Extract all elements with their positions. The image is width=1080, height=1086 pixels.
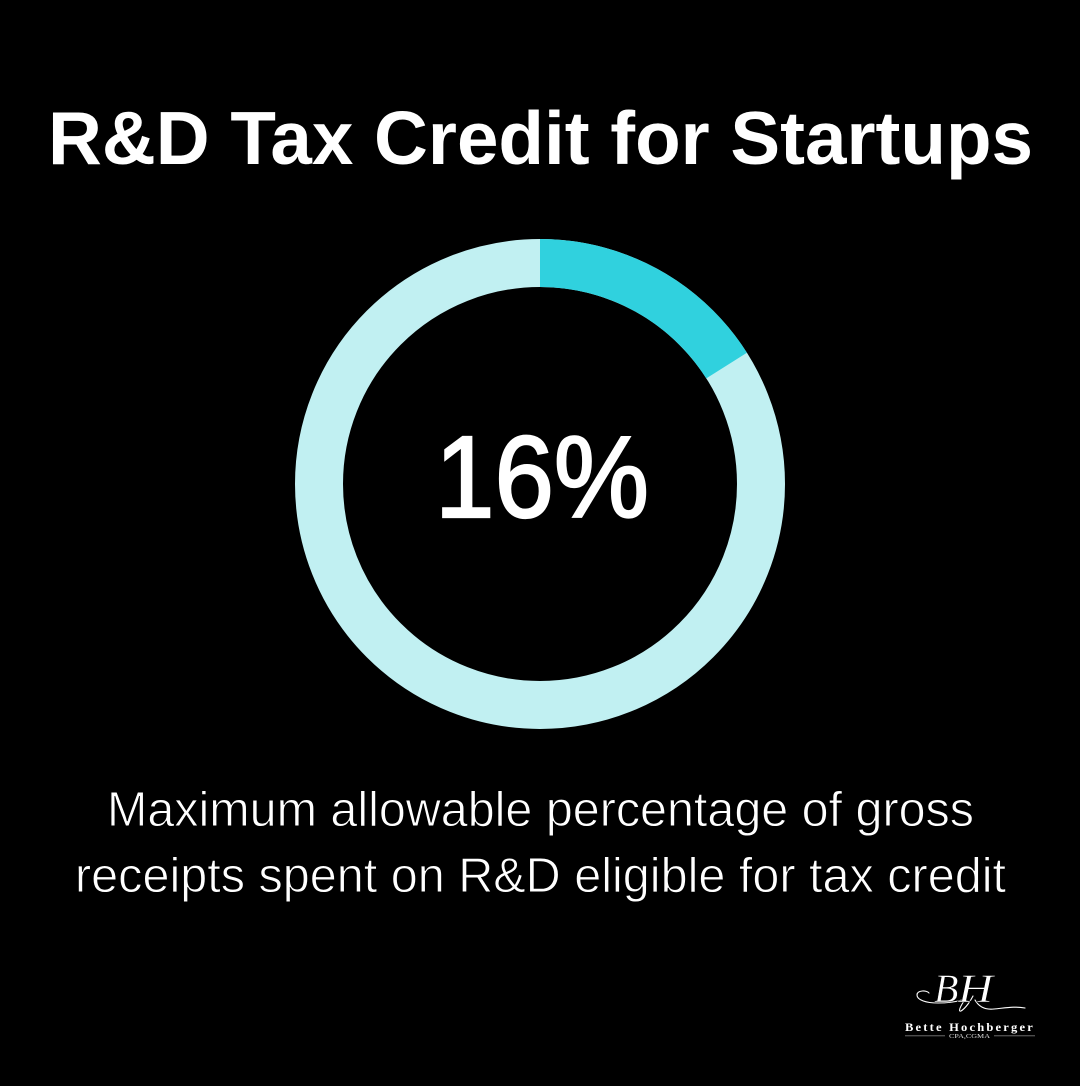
donut chart: 16 percent <box>319 239 761 705</box>
donut highlighted segment <box>540 239 747 378</box>
description text <box>75 783 1006 903</box>
signature flourish <box>917 991 1025 1011</box>
title: R&D Tax Credit for Startups <box>48 96 1033 180</box>
logo: Bette Hochberger signature <box>905 966 1035 1040</box>
logo name: Bette Hochberger <box>905 1022 1035 1034</box>
center value: 16% <box>435 412 649 542</box>
signature initials: B <box>934 966 958 1011</box>
description text: receipts spent on R&D eligible for tax credit <box>75 849 1006 903</box>
signature initials: H <box>957 966 996 1011</box>
description text: Maximum allowable percentage of gross <box>107 783 974 837</box>
logo credentials: CPA,CGMA <box>949 1034 991 1040</box>
signature initials <box>934 966 996 1011</box>
donut track <box>319 263 761 705</box>
